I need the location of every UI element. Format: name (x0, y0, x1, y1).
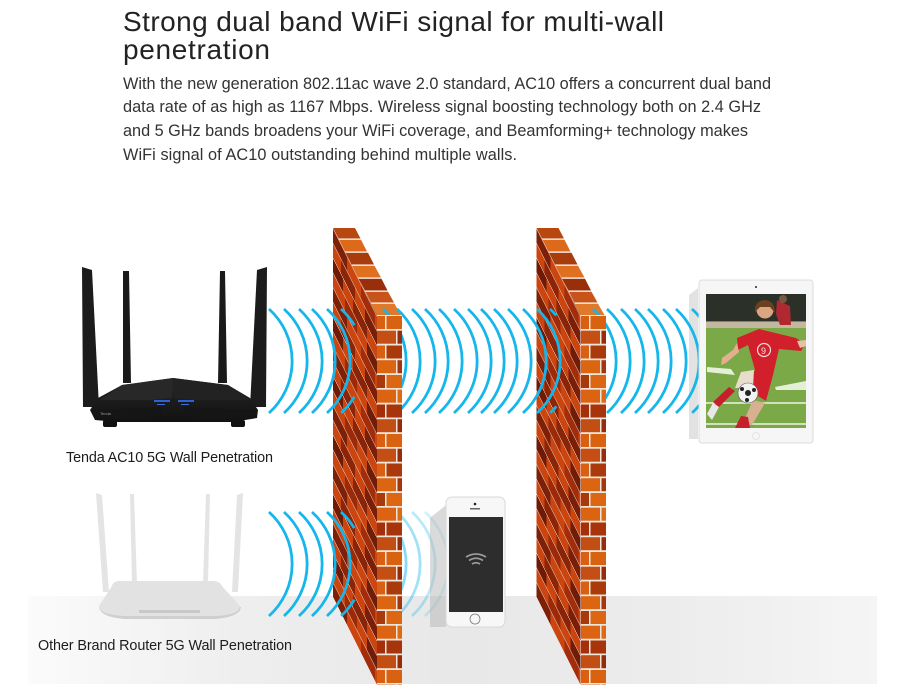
router: Tenda AC10 (82, 267, 267, 427)
label: other brand: Other Brand Router 5G Wall Penetration (38, 638, 292, 654)
description text: and 5 GHz bands broadens your WiFi coverage, and Beamforming+ technology makes (123, 122, 748, 140)
icon: wifi (466, 554, 486, 564)
router: other brand (96, 493, 243, 619)
phone (430, 497, 505, 627)
signal waves: AC10 first section (269, 309, 364, 413)
brick wall 1 front (377, 315, 402, 685)
brick wall 2 front (581, 315, 606, 685)
signal waves: other brand fading after first wall (383, 512, 448, 616)
label: Tenda AC10: Tenda AC10 5G Wall Penetration (66, 450, 273, 466)
tablet screen photo (706, 294, 806, 428)
brick wall 1 back and top (333, 228, 401, 685)
tablet (676, 280, 813, 443)
description text: With the new generation 802.11ac wave 2.0 standard, AC10 offers a concurrent dual band (123, 75, 771, 93)
title: penetration (123, 34, 270, 65)
router: Tenda AC10: Tenda (100, 411, 112, 416)
description text: WiFi signal of AC10 outstanding behind multiple walls. (123, 146, 517, 164)
description text (123, 75, 771, 164)
signal waves: AC10 between walls (383, 309, 573, 413)
title: Strong dual band WiFi signal for multi-wall (123, 6, 664, 37)
floor band (28, 596, 877, 684)
player: 9 (761, 346, 766, 356)
description text: data rate of as high as 1167 Mbps. Wireless signal boosting technology both on 2.4 GHz (123, 98, 761, 116)
title (123, 6, 664, 65)
brick wall 2 back and top (536, 228, 604, 685)
signal waves: AC10 after second wall (593, 309, 686, 413)
signal waves: other brand before first wall (269, 512, 364, 616)
